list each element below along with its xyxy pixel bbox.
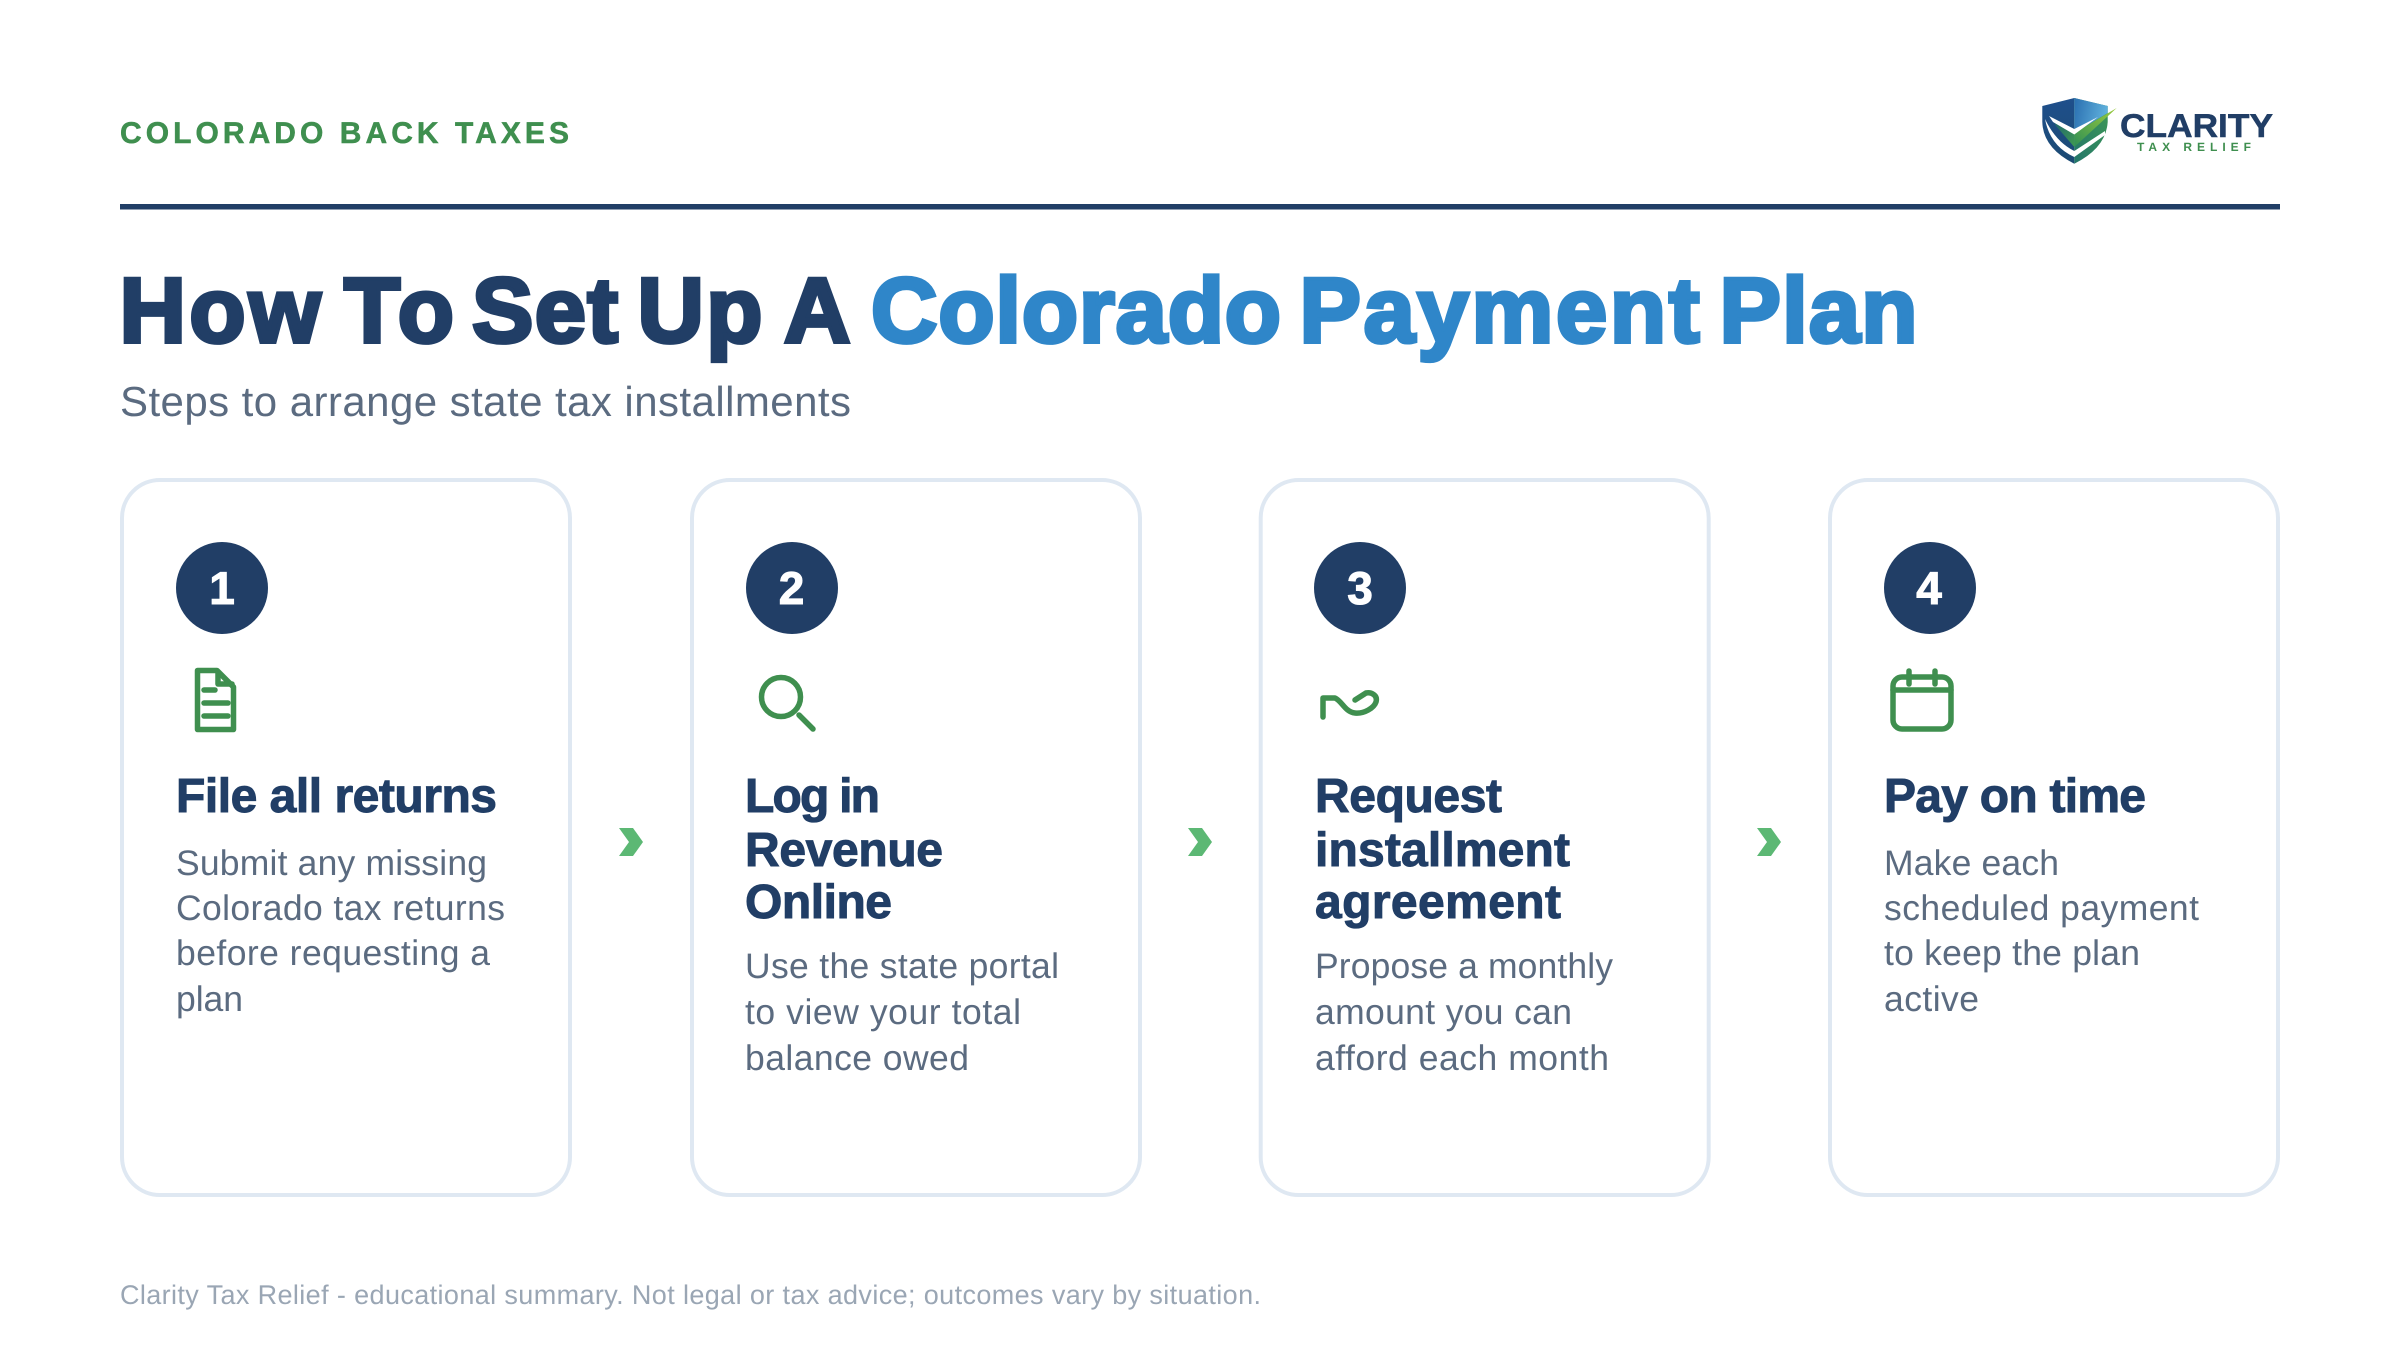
step number 3: 3 <box>1347 562 1373 614</box>
step title: Online <box>745 876 892 929</box>
step number 4: 4 <box>1916 562 1942 614</box>
icon: document <box>198 670 234 730</box>
step number 4 <box>1884 542 1976 634</box>
step description: scheduled payment <box>1884 888 2199 928</box>
panel: step 3 <box>1261 480 1709 1195</box>
subtitle: Steps to arrange state tax installments <box>120 378 851 425</box>
step title: Request <box>1315 770 1502 823</box>
step description: before requesting a <box>176 933 490 973</box>
title: Up <box>638 260 762 362</box>
step description: amount you can <box>1315 992 1572 1032</box>
step title: agreement <box>1315 876 1561 929</box>
step title: Pay on time <box>1884 770 2146 823</box>
title: Set <box>472 260 618 362</box>
step description: Make each <box>1884 843 2059 883</box>
logo: Clarity Tax Relief <box>2042 98 2273 164</box>
arrow 2 to 3 <box>1188 828 1212 856</box>
step title: File all returns <box>176 770 497 823</box>
icon: signature <box>1323 693 1376 717</box>
logo tagline: TAX RELIEF <box>2137 140 2251 154</box>
step title: Revenue <box>745 824 943 877</box>
title: A <box>784 260 850 362</box>
step description: Submit any missing <box>176 843 487 883</box>
step description: to keep the plan <box>1884 933 2140 973</box>
step description: Use the state portal <box>745 946 1059 986</box>
icon: shield <box>2042 98 2117 164</box>
step number 1: 1 <box>209 562 235 614</box>
icon: calendar <box>1893 671 1951 729</box>
eyebrow: Colorado Back Taxes: COLORADO BACK TAXES <box>120 117 569 150</box>
step description: balance owed <box>745 1038 969 1078</box>
title: How <box>120 260 321 362</box>
step description: plan <box>176 979 243 1019</box>
step description: Colorado tax returns <box>176 888 505 928</box>
step description <box>1315 946 1613 1078</box>
step number 2 <box>746 542 838 634</box>
step description <box>1884 843 2199 1019</box>
step number 2: 2 <box>779 562 804 614</box>
step number 3 <box>1314 542 1406 634</box>
step description: Propose a monthly <box>1315 946 1613 986</box>
step number 1 <box>176 542 268 634</box>
panel: step 2 <box>692 480 1140 1195</box>
logo wordmark: CLARITY <box>2120 107 2273 144</box>
title: Plan <box>1720 260 1918 362</box>
title: To <box>344 260 454 362</box>
title: Payment <box>1300 260 1700 362</box>
step title: installment <box>1315 824 1570 877</box>
step description <box>176 843 505 1019</box>
panel: step 1 <box>122 480 570 1195</box>
step title <box>1315 770 1570 929</box>
step description <box>745 946 1059 1078</box>
step title: Log in <box>745 770 880 823</box>
title: Colorado <box>871 260 1281 362</box>
icon: magnifier <box>762 678 813 729</box>
footer disclaimer: Clarity Tax Relief - educational summary. Not legal or tax advice; outcomes vary by situation. <box>120 1280 1261 1310</box>
arrow 1 to 2 <box>619 828 643 856</box>
panel: step 4 <box>1830 480 2278 1195</box>
arrow 3 to 4 <box>1757 828 1781 856</box>
step description: to view your total <box>745 992 1021 1032</box>
step title <box>745 770 943 929</box>
title <box>120 260 1918 362</box>
step description: afford each month <box>1315 1038 1609 1078</box>
step description: active <box>1884 979 1979 1019</box>
header rule <box>120 204 2280 210</box>
